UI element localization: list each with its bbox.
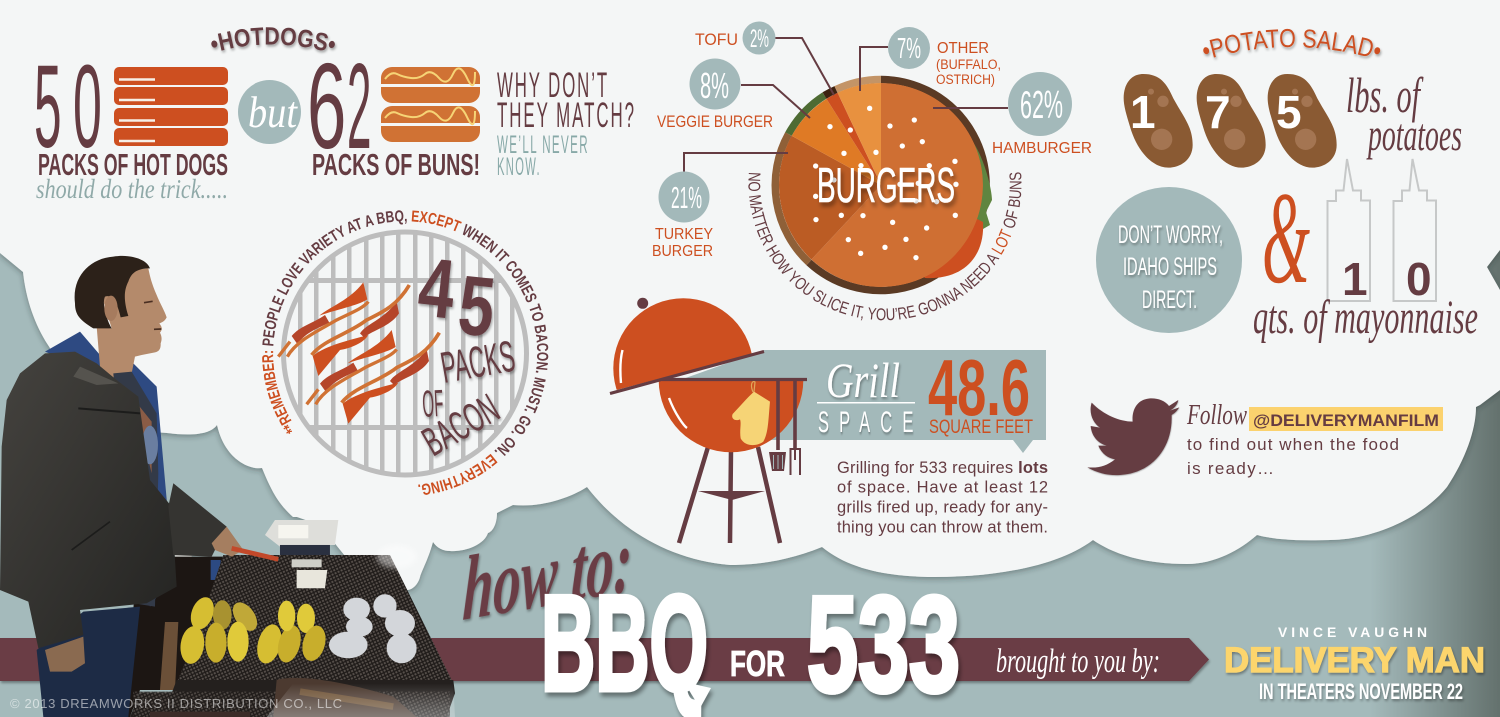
delivery man logo [1224, 624, 1485, 704]
idaho circle: DON’T WORRY, [1118, 221, 1223, 249]
hotdogs heading: •HOTDOGS• [211, 27, 338, 54]
bun rim [775, 79, 986, 290]
follow line: @DELIVERYMANFILM [1253, 411, 1439, 430]
FOR: FOR [730, 643, 785, 684]
number 62: 2 [347, 39, 371, 175]
icon: twitter bird [1087, 398, 1179, 475]
legs [679, 447, 780, 543]
foil potatoes [329, 594, 417, 663]
48.6 square feet: 48.6 [928, 343, 1030, 432]
hair [75, 256, 150, 328]
grilling paragraph: of space. Have at least 12 [837, 478, 1048, 496]
bacon strips [278, 282, 439, 424]
brought to you by: brought to you by: [996, 643, 1160, 680]
idaho circle: DIRECT. [1142, 286, 1197, 314]
45 packs of bacon: 5 [454, 257, 499, 355]
text: THEY MATCH? [497, 96, 636, 135]
hood [45, 332, 173, 607]
turkey callout [652, 172, 713, 260]
tofu callout: 2% [750, 25, 769, 53]
other callout [888, 27, 1001, 87]
idaho circle: IDAHO SHIPS [1123, 253, 1217, 281]
packs of hot dogs label: PACKS OF HOT DOGS [38, 147, 228, 182]
delivery man logo: DELIVERY MAN [1224, 641, 1485, 680]
number 50: 5 [34, 41, 62, 173]
lbs of potatoes: lbs. of [1346, 67, 1424, 123]
why don't they match: WE’LL NEVER [497, 131, 589, 159]
tongs [232, 548, 278, 559]
foil pan [265, 520, 338, 555]
grilling paragraph [837, 459, 1048, 536]
copyright: © 2013 DREAMWORKS II DISTRIBUTION CO., LLC [10, 696, 342, 711]
grill section [610, 298, 1048, 543]
icon: hot dog packs [114, 67, 228, 146]
number 50 [34, 41, 102, 173]
turkey callout: 21% [671, 180, 702, 215]
grill space label: SPACE [818, 406, 924, 439]
grill grate [280, 225, 530, 485]
idaho circle [1096, 187, 1242, 333]
number 50: 0 [73, 41, 102, 173]
grill space label [817, 352, 924, 439]
other callout: OSTRICH) [936, 72, 995, 87]
banner bar [0, 638, 1209, 681]
follow line [1186, 400, 1443, 431]
45 packs of bacon: BACON [414, 385, 507, 465]
other callout: (BUFFALO, [936, 57, 1001, 72]
533: 533 [807, 568, 960, 717]
mayonnaise jars: 1 [1342, 253, 1368, 305]
veggie callout [657, 58, 773, 131]
main title [461, 508, 1160, 717]
other callout: 7% [897, 33, 921, 65]
why don't they match: KNOW. [497, 153, 541, 181]
number 62: 6 [307, 39, 346, 175]
sesame seeds [813, 106, 959, 260]
turkey callout: BURGER [652, 243, 713, 260]
number 62 [307, 39, 371, 175]
other callout: OTHER [937, 40, 989, 57]
lbs of potatoes [1346, 67, 1462, 160]
oven mitt [732, 392, 770, 445]
twitter text: to find out when the food [1187, 435, 1399, 454]
grilling paragraph: Grilling for 533 requires lots [837, 459, 1048, 477]
why don't they match [497, 66, 636, 181]
48.6 square feet [928, 343, 1033, 438]
lid [613, 298, 752, 390]
twitter text: is ready… [1187, 459, 1274, 478]
icon: kettle grill [610, 298, 807, 543]
photo: grill and smoke [127, 520, 455, 717]
hamburger callout [992, 72, 1092, 157]
jeans [37, 607, 140, 717]
veggie callout: VEGGIE BURGER [657, 113, 773, 131]
how to script: how to: [461, 508, 634, 640]
hotdogs section [34, 39, 636, 204]
delivery man logo: VINCE VAUGHN [1278, 624, 1431, 640]
spatula and fork [769, 380, 800, 475]
meat [273, 678, 417, 717]
grill space banner [680, 350, 1046, 453]
BBQ [541, 567, 711, 717]
why don't they match: WHY DON’T [497, 66, 609, 105]
burgers title: BURGERS [817, 159, 955, 213]
bowl [659, 380, 803, 452]
photo: man [0, 256, 278, 717]
jacket [0, 352, 177, 648]
48.6 square feet: SQUARE FEET [929, 417, 1033, 438]
tofu callout [695, 22, 776, 54]
icon: lettuce and tomato [900, 142, 992, 278]
potato salad heading: •POTATO SALAD• [1203, 28, 1382, 60]
twitter text [1187, 435, 1399, 478]
tofu callout: TOFU [695, 31, 738, 49]
but circle: but [248, 88, 299, 137]
potatoes 175: 1 [1130, 86, 1156, 138]
mayonnaise jars [1328, 159, 1436, 305]
hamburger callout: 62% [1020, 84, 1063, 127]
leader lines [684, 38, 1008, 172]
45 packs of bacon: 4 [414, 239, 460, 337]
pie slices [779, 83, 983, 287]
potatoes 175: 5 [1276, 86, 1302, 138]
bacon section [262, 210, 548, 495]
potato salad section [1096, 67, 1478, 344]
ear [104, 296, 118, 321]
mayonnaise jars: 0 [1406, 253, 1432, 305]
potato salad section: & [1262, 164, 1310, 311]
follow line: Follow [1186, 400, 1247, 431]
packs of buns label: PACKS OF BUNS! [312, 147, 480, 182]
potatoes 175 [1124, 74, 1337, 168]
burgers chart [652, 22, 1092, 320]
smoke [377, 545, 417, 568]
veggie callout: 8% [700, 65, 729, 106]
twitter section [1087, 398, 1443, 478]
grilling paragraph: grills fired up, ready for any- [837, 498, 1048, 516]
should do the trick: should do the trick..... [36, 174, 228, 204]
neck and face [97, 268, 167, 380]
BBQ: BBQ [541, 567, 708, 717]
grill space label: Grill [826, 352, 900, 408]
circular caption: **REMEMBER: PEOPLE LOVE VARIETY AT A BBQ, EXCEPT WHEN IT COMES TO BACON. MUST. GO. ON. EVERYTHING. [262, 210, 548, 495]
45 packs of bacon [414, 239, 519, 465]
icon: hot dog buns [381, 67, 480, 142]
shirt [113, 372, 158, 607]
hamburger callout: HAMBURGER [992, 140, 1092, 157]
grill mesh [177, 555, 453, 683]
butter blocks [297, 570, 327, 588]
turkey callout: TURKEY [655, 226, 713, 243]
grilling paragraph: thing you can throw at them. [837, 518, 1048, 536]
but circle [238, 80, 301, 144]
45 packs of bacon: OF [421, 383, 444, 426]
45 packs of bacon: PACKS [437, 332, 519, 393]
hands [45, 637, 85, 672]
potatoes 175: 7 [1205, 86, 1231, 138]
corn [178, 594, 329, 666]
dark area behind grill [127, 557, 227, 717]
